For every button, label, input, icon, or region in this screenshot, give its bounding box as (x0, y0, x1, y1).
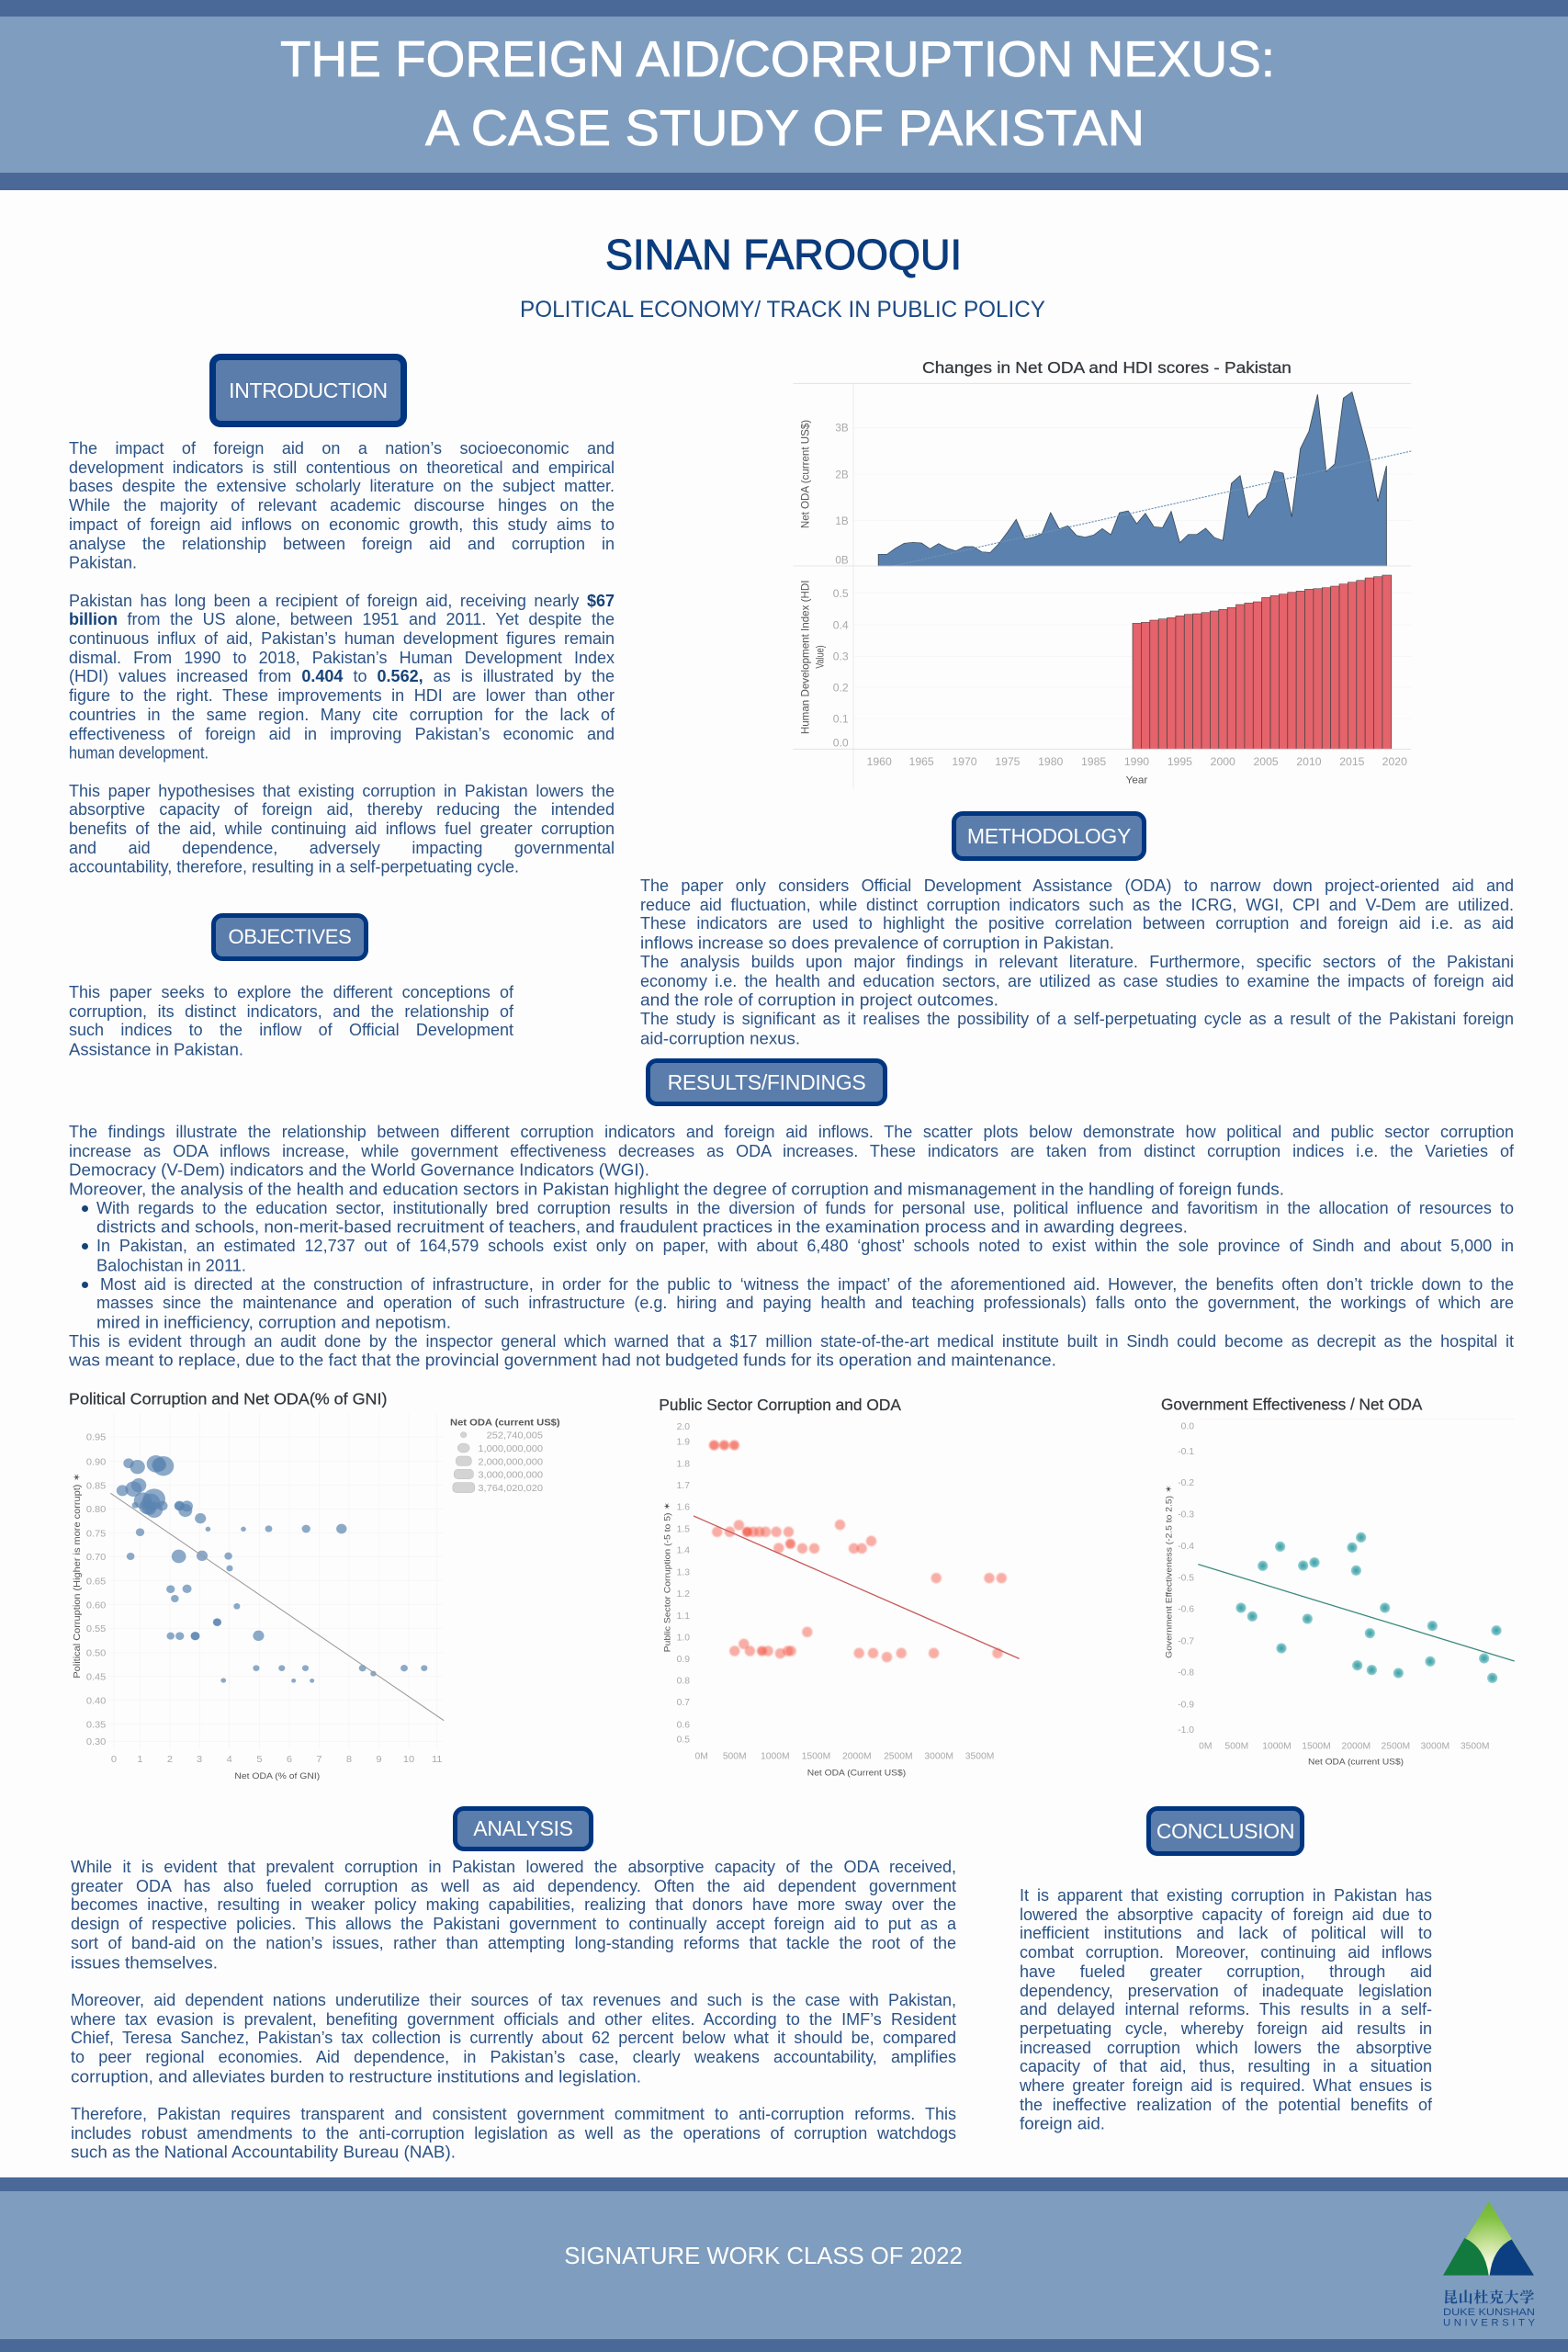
x-axis ticks: 1960 (867, 756, 892, 768)
legend: 2,000,000,000 (478, 1457, 543, 1467)
text: methodology (640, 876, 1514, 1047)
text: results and findings: The findings illustrate the relationship between different corruption indicators and foreign aid inflows. The scatter plots below demonstrate how political and public sector corruption (69, 1123, 1514, 1141)
x-axis ticks: 500M (1224, 1742, 1248, 1752)
y-axis ticks: 0.6 (677, 1720, 690, 1730)
text: conclusion: lowered the absorptive capacity of foreign aid due to (1020, 1905, 1432, 1924)
text: introduction: Pakistan. (69, 554, 137, 572)
text: objectives (69, 983, 514, 1059)
x-axis ticks: 10 (403, 1754, 414, 1765)
x-axis ticks: 2000M (842, 1752, 872, 1762)
y-axis labels: Human Development Index (HDI (799, 580, 812, 734)
text: results and findings: Balochistan in 2011. (96, 1256, 246, 1274)
x-axis ticks: 0 (111, 1754, 117, 1765)
bubbles (117, 1455, 427, 1683)
text: results and findings: was meant to replace, due to the fact that the provincial government had not budgeted funds for its operation and maintenance. (68, 1351, 1056, 1370)
y-axis ticks: 0.85 (86, 1481, 106, 1491)
text: conclusion: foreign aid. (1020, 2115, 1105, 2133)
trend line (694, 1516, 1020, 1658)
text: conclusion: perpetuating cycle, whereby foreign aid results in (1020, 2019, 1432, 2038)
y-axis ticks: 0.5 (833, 588, 849, 600)
y-axis ticks: 0.80 (86, 1504, 106, 1515)
text: methodology: and the role of corruption in project outcomes. (640, 991, 998, 1010)
title: A CASE STUDY OF PAKISTAN (425, 99, 1145, 156)
x-axis ticks: 3500M (1461, 1742, 1489, 1752)
y-axis ticks: 0.45 (86, 1672, 106, 1682)
text: analysis: such as the National Accountability Bureau (NAB). (71, 2143, 456, 2162)
text: introduction: accountability, therefore, resulting in a self-perpetuating cycle. (69, 858, 519, 876)
text: methodology: The analysis builds upon major findings in relevant literature. Furthermore, specific sectors of the Pakistani (640, 953, 1514, 971)
x-axis ticks: 9 (376, 1754, 382, 1765)
y-axis ticks: 0.95 (86, 1432, 106, 1443)
x-axis ticks (1199, 1742, 1489, 1752)
footer band (0, 2177, 1568, 2352)
y-axis ticks: 1.6 (677, 1502, 690, 1512)
text: introduction: The impact of foreign aid on a nation’s socioeconomic and (69, 439, 615, 458)
y-axis ticks: 0B (835, 554, 849, 567)
text: analysis: sort of band-aid on the nation’s issues, rather than attempting long-standing reforms that tackle the root of the (71, 1934, 956, 1952)
text: introduction: dismal. From 1990 to 2018, Pakistan’s Human Development Index (69, 649, 615, 667)
text: introduction: benefits of the aid, while continuing aid inflows fuel greater corruption (69, 820, 615, 838)
text: results and findings: Most aid is directed at the construction of infrastructure, in order for the public to ‘witness the impact’ of the aforementioned aid. However, the benefits often don’t trickle down to the (100, 1275, 1514, 1294)
legend: 3,764,020,020 (478, 1483, 543, 1494)
text: analysis: to peer regional economies. Aid dependence, in Pakistan’s case, clearly weakens accountability, amplifies (71, 2048, 956, 2066)
y-axis ticks: 2.0 (677, 1422, 690, 1432)
legend: 1,000,000,000 (478, 1443, 543, 1454)
text: introduction: (HDI) values increased from 0.404 to 0.562, as is illustrated by the (69, 667, 615, 685)
text: analysis: greater ODA has also fueled corruption as well as aid dependency. Often the aid dependent government (71, 1877, 956, 1895)
text: methodology: The paper only considers Official Development Assistance (ODA) to narrow down project-oriented aid and (640, 876, 1514, 895)
y-axis ticks: 0.60 (86, 1600, 106, 1611)
text: introduction: billion from the US alone, between 1951 and 2011. Yet despite the (69, 610, 615, 628)
text: methodology: These indicators are used to highlight the positive correlation between corruption and foreign aid i.e. as aid (640, 914, 1514, 933)
text: analysis: corruption, and alleviates burden to restructure institutions and legislation. (71, 2067, 641, 2086)
heading: introduction: INTRODUCTION (229, 379, 388, 402)
logo mark (1443, 2201, 1534, 2276)
text: conclusion: combat corruption. Moreover, continuing aid inflows (1020, 1943, 1432, 1962)
x-axis ticks (111, 1754, 443, 1765)
chart: public sector corruption scatter (659, 1396, 1020, 1777)
y-axis ticks: 0.50 (86, 1648, 106, 1659)
text: results and findings: masses since the maintenance and operation of such infrastructure (e.g. hiring and paying health and teaching professionals) falls onto the government, the workings of which are (96, 1294, 1514, 1312)
y-axis ticks: 1.8 (677, 1459, 690, 1469)
x-axis ticks: 3500M (965, 1752, 994, 1762)
x-axis ticks: 1980 (1038, 756, 1063, 768)
x-axis ticks: 2005 (1254, 756, 1279, 768)
y-axis ticks: -0.7 (1178, 1636, 1194, 1646)
heading: results/findings (646, 1058, 887, 1106)
x-axis ticks: 1 (137, 1754, 143, 1765)
x-axis label: Net ODA (Current US$) (807, 1768, 906, 1777)
text: introduction: analyse the relationship between foreign aid and corruption in (69, 535, 615, 553)
y-axis ticks: 1.4 (677, 1546, 690, 1556)
chart title: Changes in Net ODA and HDI scores - Pakistan (922, 359, 1292, 377)
y-axis labels: Net ODA (current US$) (799, 420, 812, 528)
chart: government effectiveness scatter (1161, 1395, 1515, 1767)
y-axis ticks: 0.7 (677, 1698, 690, 1708)
x-axis label: Net ODA (% of GNI) (234, 1771, 320, 1781)
y-axis label: Government Effectiveness (-2.5 to 2.5) ✶ (1164, 1485, 1173, 1658)
y-axis ticks: -1.0 (1178, 1725, 1194, 1736)
logo text: UNIVERSITY (1443, 2317, 1535, 2328)
y-axis ticks: 1.9 (677, 1438, 690, 1448)
bar chart: HDI (1133, 575, 1392, 749)
text: results and findings: mired in inefficiency, corruption and nepotism. (96, 1314, 451, 1332)
text: methodology: aid-corruption nexus. (640, 1029, 800, 1047)
y-axis ticks: -0.8 (1178, 1668, 1194, 1679)
x-axis ticks: 1965 (909, 756, 934, 768)
text: introduction: bases despite the extensive scholarly literature on the subject matter. (69, 477, 615, 495)
logo: Duke Kunshan University (1443, 2201, 1535, 2328)
heading: methodology (952, 811, 1146, 861)
heading: conclusion (1146, 1806, 1304, 1856)
y-axis ticks: 0.4 (833, 619, 849, 632)
y-axis ticks: 0.35 (86, 1720, 106, 1730)
x-axis ticks: 1985 (1081, 756, 1106, 768)
y-axis ticks: 0.30 (86, 1736, 106, 1747)
x-axis ticks: 1975 (995, 756, 1021, 768)
text: results and findings: increase as ODA inflows increase, while government effectiveness decreases as ODA increases. These indicators are taken from distinct corruption indices i.e. the Varieties of (69, 1142, 1514, 1160)
chart: political corruption scatter (69, 1390, 560, 1781)
text: introduction: human development. (69, 744, 209, 763)
text: conclusion: the ineffective realization of the potential benefits of (1020, 2096, 1432, 2114)
y-axis ticks: 1.0 (677, 1633, 690, 1643)
x-axis ticks: 2500M (884, 1752, 913, 1762)
text: introduction: effectiveness of foreign aid in improving Pakistan’s economic and (69, 725, 615, 743)
x-axis ticks: 1000M (1262, 1742, 1292, 1752)
y-axis ticks: 0.40 (86, 1696, 106, 1706)
heading: methodology: METHODOLOGY (967, 823, 1131, 847)
chart: net ODA and HDI (794, 359, 1411, 788)
text: analysis: While it is evident that prevalent corruption in Pakistan lowered the absorptive capacity of the ODA received, (71, 1858, 956, 1876)
x-axis ticks: 2000M (1342, 1742, 1371, 1752)
heading: objectives: OBJECTIVES (229, 925, 351, 948)
text: objectives: such indices to the inflow of Official Development (69, 1021, 513, 1039)
x-axis ticks: 3000M (924, 1752, 953, 1762)
text: results and findings: districts and schools, non-merit-based recruitment of teachers, and fraudulent practices in the examination process and in awarding degrees. (96, 1218, 1188, 1237)
text: introduction: development indicators is still contentious on theoretical and empirical (69, 458, 615, 477)
legend (450, 1418, 560, 1494)
title (280, 30, 1275, 156)
y-axis ticks: 0.1 (833, 713, 849, 726)
x-axis ticks: 1970 (952, 756, 977, 768)
heading: analysis (453, 1806, 593, 1851)
text: results and findings: This is evident through an audit done by the inspector general which warned that a $17 million state-of-the-art medical institute built in Sindh could become as decrepit as the hospital it (69, 1332, 1514, 1351)
text: results and findings: With regards to the education sector, institutionally bred corruption results in the diversion of funds for personal use, political influence and favoritism in the allocation of resources to (96, 1199, 1514, 1217)
y-axis ticks: 3B (835, 423, 849, 435)
text: introduction: and aid dependence, adversely impacting governmental (69, 839, 615, 857)
x-axis ticks: 2500M (1382, 1742, 1410, 1752)
heading: analysis: ANALYSIS (473, 1816, 573, 1840)
text: results and findings: Democracy (V-Dem) indicators and the World Governance Indicators (WGI). (69, 1161, 649, 1180)
x-axis label: Net ODA (current US$) (1308, 1758, 1404, 1767)
text: analysis: Moreover, aid dependent nations underutilize their sources of tax revenues and such is the case with Pakistan, (71, 1991, 956, 2009)
text: conclusion (1020, 1886, 1433, 2133)
footer text: SIGNATURE WORK CLASS OF 2022 (564, 2244, 963, 2269)
y-axis label: Public Sector Corruption (-5 to 5) ✶ (662, 1502, 671, 1652)
y-axis ticks: 0.2 (833, 682, 849, 695)
y-axis ticks: -0.9 (1178, 1700, 1194, 1710)
y-axis ticks: 2B (835, 469, 849, 481)
x-axis ticks: 1500M (802, 1752, 830, 1762)
logo text: DUKE KUNSHAN (1443, 2307, 1535, 2318)
text: introduction: figure to the right. These improvements in HDI are lower than other (69, 686, 615, 705)
author name: SINAN FAROOQUI (605, 231, 962, 278)
title: THE FOREIGN AID/CORRUPTION NEXUS: (280, 30, 1275, 87)
logo text (1443, 2286, 1535, 2328)
x-axis ticks: 2010 (1296, 756, 1322, 768)
x-axis ticks: 2020 (1382, 756, 1407, 768)
text: methodology: The study is significant as it realises the possibility of a self-perpetuating cycle as a result of the Pakistani foreign (640, 1010, 1514, 1028)
text: introduction: impact of foreign aid inflows on economic growth, this study aims to (69, 515, 615, 534)
heading: conclusion: CONCLUSION (1156, 1819, 1294, 1843)
text: conclusion: where greater foreign aid is required. What ensues is (1020, 2076, 1432, 2095)
area chart: net ODA (878, 392, 1386, 566)
x-axis ticks: 4 (227, 1754, 232, 1765)
text: objectives: corruption, its distinct indicators, and the relationship of (69, 1002, 513, 1021)
text: introduction: absorptive capacity of foreign aid, thereby reducing the intended (69, 800, 615, 819)
chart title: Political Corruption and Net ODA(% of GNI) (69, 1390, 387, 1408)
y-axis ticks: -0.3 (1178, 1510, 1194, 1521)
y-axis ticks (1178, 1421, 1194, 1736)
y-axis ticks: 0.3 (833, 651, 849, 663)
x-axis ticks: 3 (197, 1754, 202, 1765)
text: conclusion: have fueled greater corruption, through aid (1020, 1962, 1432, 1981)
text: analysis: design of respective policies. This allows the Pakistani government to continually accept foreign aid to put as a (71, 1915, 956, 1933)
text: introduction: This paper hypothesises that existing corruption in Pakistan lowers the (69, 782, 615, 800)
x-axis ticks: 1995 (1168, 756, 1192, 768)
y-axis ticks: 1.7 (677, 1481, 690, 1491)
x-axis ticks: 8 (346, 1754, 352, 1765)
trend line: net ODA (894, 451, 1411, 566)
text: conclusion: increased corruption which lowers the absorptive (1020, 2039, 1432, 2057)
y-axis ticks: 1.5 (677, 1524, 690, 1534)
text: analysis: includes robust amendments to the anti-corruption legislation as well as the operations of corruption watchdogs (71, 2124, 956, 2143)
y-axis ticks: 0.70 (86, 1552, 106, 1563)
y-axis ticks: 0.90 (86, 1457, 106, 1467)
x-axis ticks: 2015 (1339, 756, 1365, 768)
x-axis ticks: 500M (723, 1752, 747, 1762)
x-axis ticks: 2 (167, 1754, 173, 1765)
text: objectives: This paper seeks to explore the different conceptions of (69, 983, 513, 1001)
text: introduction: countries in the same region. Many cite corruption for the lack of (69, 706, 615, 724)
text: methodology: economy i.e. the health and education sectors, are utilized as case studies to examine the impacts of foreign aid (640, 972, 1514, 990)
y-axis ticks: 0.5 (677, 1735, 690, 1745)
heading: introduction (209, 354, 407, 427)
text: conclusion: dependency, preservation of inadequate legislation (1020, 1982, 1432, 2000)
text: conclusion: capacity of that aid, thus, resulting in a situation (1020, 2057, 1432, 2075)
y-axis ticks: 0.0 (833, 737, 849, 750)
y-axis ticks: 0.0 (1181, 1421, 1194, 1431)
y-axis ticks: 0.55 (86, 1623, 106, 1634)
logo text: 昆山杜克大学 (1443, 2286, 1534, 2307)
text: results and findings (68, 1123, 1514, 1370)
text: introduction (69, 439, 615, 876)
text: analysis: Chief, Teresa Sanchez, Pakistan’s tax collection is currently about 62 percent below what it should be, compared (71, 2029, 956, 2047)
y-axis ticks: -0.4 (1178, 1542, 1194, 1552)
y-axis ticks: 1.2 (677, 1589, 690, 1600)
text: analysis: where tax evasion is prevalent, benefiting government officials and other elites. According to the IMF’s Resident (71, 2010, 956, 2029)
y-axis ticks: 0.75 (86, 1529, 106, 1539)
y-axis ticks: 0.65 (86, 1577, 106, 1587)
y-axis ticks (833, 423, 849, 750)
text: analysis: issues themselves. (71, 1953, 218, 1972)
chart title: Government Effectiveness / Net ODA (1161, 1395, 1423, 1413)
x-axis ticks: 7 (316, 1754, 322, 1765)
y-axis labels (799, 420, 827, 734)
y-axis labels: Value) (814, 645, 827, 669)
x-axis ticks: 6 (287, 1754, 292, 1765)
text: analysis: becomes inactive, resulting in weaker policy making capabilities, realizing that donors have more sway over the (71, 1895, 956, 1914)
x-axis ticks: 3000M (1421, 1742, 1450, 1752)
y-axis ticks: 1B (835, 515, 849, 527)
text: methodology: reduce aid fluctuation, while distinct corruption indicators such as the ICRG, WGI, CPI and V-Dem are utilized. (640, 896, 1514, 914)
text: introduction: Pakistan has long been a recipient of foreign aid, receiving nearly $67 (69, 592, 615, 610)
y-axis ticks (86, 1432, 106, 1747)
legend: 3,000,000,000 (478, 1470, 543, 1481)
text: analysis: Therefore, Pakistan requires transparent and consistent government commitment to anti-corruption reforms. This (71, 2105, 956, 2123)
y-axis label: Political Corruption (Higher is more corrupt) ✶ (73, 1473, 83, 1679)
y-axis ticks: -0.5 (1178, 1573, 1194, 1583)
text: analysis (71, 1858, 956, 2162)
text: conclusion: and delayed internal reforms. This results in a self- (1020, 2000, 1432, 2018)
y-axis ticks (677, 1422, 690, 1745)
text: results and findings: In Pakistan, an estimated 12,737 out of 164,579 schools exist only on paper, with about 6,480 ‘ghost’ schools noted to exist within the sole province of Sindh and about 5,000 in (96, 1237, 1514, 1255)
y-axis ticks: 0.9 (677, 1655, 690, 1665)
points (1235, 1532, 1502, 1683)
trend line (1198, 1565, 1515, 1661)
x-axis ticks: 1000M (761, 1752, 790, 1762)
heading: results/findings: RESULTS/FINDINGS (668, 1069, 865, 1093)
text: conclusion: inefficient institutions and lack of political will to (1020, 1924, 1432, 1942)
x-axis label: Year (1126, 774, 1148, 786)
legend: Net ODA (current US$) (450, 1418, 560, 1429)
text: methodology: inflows increase so does prevalence of corruption in Pakistan. (640, 934, 1114, 953)
x-axis ticks: 1500M (1302, 1742, 1331, 1752)
text: introduction: While the majority of relevant academic discourse hinges on the (69, 496, 615, 514)
x-axis ticks: 5 (256, 1754, 263, 1765)
y-axis ticks: -0.2 (1178, 1478, 1194, 1488)
y-axis ticks: -0.6 (1178, 1605, 1194, 1615)
x-axis ticks: 2000 (1211, 756, 1235, 768)
y-axis ticks: 0.8 (677, 1677, 690, 1687)
y-axis ticks: 1.1 (677, 1611, 690, 1622)
subtitle: POLITICAL ECONOMY/ TRACK IN PUBLIC POLICY (520, 297, 1045, 322)
trend line (110, 1493, 444, 1721)
heading: objectives (211, 913, 368, 961)
text: objectives: Assistance in Pakistan. (69, 1041, 243, 1059)
x-axis ticks: 1990 (1124, 756, 1149, 768)
y-axis ticks: -0.1 (1178, 1447, 1194, 1457)
text: conclusion: It is apparent that existing corruption in Pakistan has (1020, 1886, 1432, 1905)
x-axis ticks (867, 756, 1407, 768)
chart title: Public Sector Corruption and ODA (659, 1396, 901, 1414)
header band (0, 0, 1568, 190)
x-axis ticks: 0M (1199, 1742, 1213, 1752)
x-axis ticks: 11 (432, 1754, 443, 1765)
y-axis ticks: 1.3 (677, 1567, 690, 1577)
x-axis ticks: 0M (695, 1752, 708, 1762)
points (709, 1440, 1007, 1662)
text: introduction: continuous influx of aid, Pakistan’s human development figures remain (69, 629, 615, 648)
text: results and findings: Moreover, the analysis of the health and education sectors in Pakistan highlight the degree of corruption and mismanagement in the handling of foreign funds. (69, 1181, 1284, 1199)
x-axis ticks (695, 1752, 994, 1762)
legend: 252,740,005 (487, 1430, 543, 1442)
